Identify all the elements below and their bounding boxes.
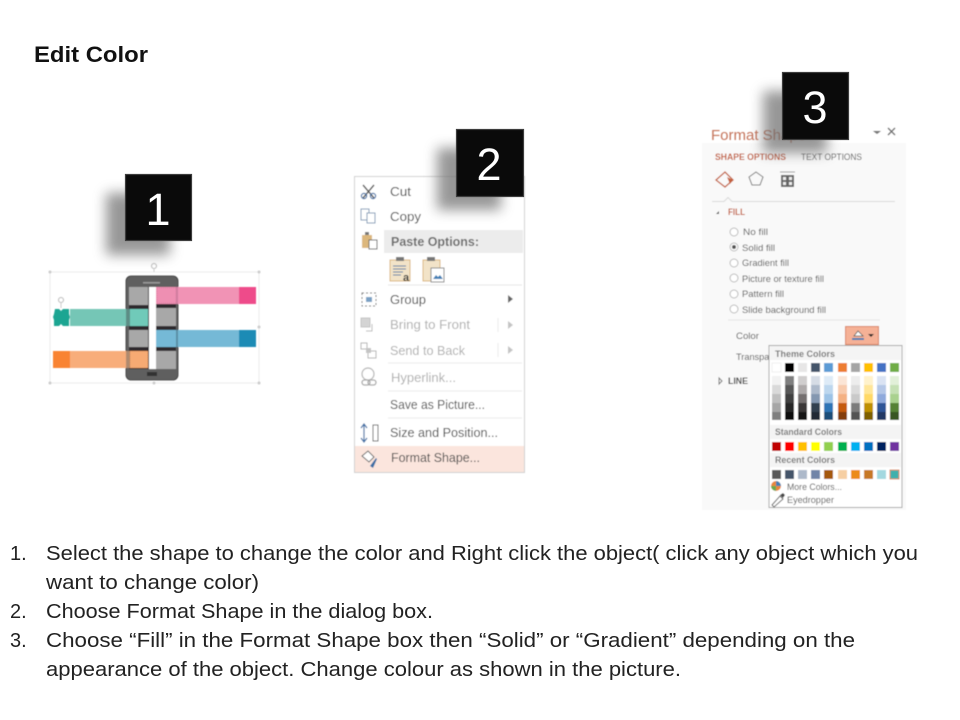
instructions list: Select the shape to change the color and Right click the object( click any object which you xyxy=(46,543,918,565)
menu item: format shape (highlighted) xyxy=(355,446,524,472)
step badge 1: 1 xyxy=(145,184,171,235)
theme colors main row xyxy=(772,363,899,372)
title: Edit Color xyxy=(34,42,148,67)
icon row xyxy=(716,172,795,187)
tabs: SHAPE OPTIONS xyxy=(715,152,786,162)
instructions list: 3. xyxy=(10,630,27,652)
tabs xyxy=(715,152,862,162)
menu item: group: Group xyxy=(390,292,426,307)
teal bar xyxy=(53,309,148,326)
color row and button: Color xyxy=(736,331,759,341)
pink bar xyxy=(156,287,256,304)
panel: step 2 context menu xyxy=(354,176,524,472)
instructions list: 2. xyxy=(10,601,27,623)
menu item: cut xyxy=(361,184,411,199)
menu item: size and position xyxy=(361,424,498,442)
pane controls xyxy=(873,128,895,135)
recent colors xyxy=(770,453,901,479)
instructions list: appearance of the object. Change colour as shown in the picture. xyxy=(46,659,681,681)
fill radio options xyxy=(730,227,826,315)
fill heading: FILL xyxy=(728,207,746,217)
fill radio options: Solid fill xyxy=(742,243,775,253)
menu item: copy xyxy=(361,209,421,224)
step badge 3 xyxy=(763,72,849,153)
standard colors xyxy=(770,425,901,451)
instructions list: 1. xyxy=(10,543,27,565)
menu background xyxy=(354,176,524,472)
fill radio options: Slide background fill xyxy=(742,305,826,315)
orange bar xyxy=(53,351,148,368)
recent colors: Recent Colors xyxy=(775,455,835,465)
fill radio options: Picture or texture fill xyxy=(742,274,824,284)
step badge 3: 3 xyxy=(802,82,828,133)
menu item: group xyxy=(362,292,513,307)
transparency label: Transpa xyxy=(736,352,770,362)
paste icons xyxy=(390,257,444,284)
fill radio options: Pattern fill xyxy=(742,289,784,299)
more colors option: More Colors... xyxy=(787,482,842,492)
standard colors: Standard Colors xyxy=(775,427,842,437)
menu item: send to back: Send to Back xyxy=(390,343,465,358)
line heading xyxy=(719,376,748,386)
theme color shades xyxy=(772,376,899,420)
eyedropper option xyxy=(772,493,834,507)
phone body xyxy=(126,276,178,380)
instructions list: Choose Format Shape in the dialog box. xyxy=(46,601,433,623)
theme colors heading: Theme Colors xyxy=(775,349,835,359)
step badge 1 xyxy=(106,174,192,255)
fill radio options: Gradient fill xyxy=(742,258,789,268)
line heading: LINE xyxy=(728,376,748,386)
menu item: bring to front: Bring to Front xyxy=(390,317,470,332)
menu item: paste options xyxy=(362,230,523,253)
menu item: format shape (highlighted): Format Shape... xyxy=(391,450,480,465)
step badge 2 xyxy=(437,129,524,210)
eyedropper option: Eyedropper xyxy=(787,495,834,505)
tabs: TEXT OPTIONS xyxy=(801,152,862,162)
menu item: hyperlink xyxy=(362,368,456,385)
pane title: Format Shape xyxy=(711,127,806,144)
instructions list xyxy=(10,543,918,681)
menu item: bring to front xyxy=(361,317,513,332)
menu item: paste options: Paste Options: xyxy=(391,235,479,249)
menu item: hyperlink: Hyperlink... xyxy=(391,370,456,385)
step badge 2: 2 xyxy=(476,139,502,190)
menu item: copy: Copy xyxy=(390,209,421,224)
fill heading xyxy=(716,207,746,217)
selection frame xyxy=(48,264,260,384)
color palette popup xyxy=(769,346,902,508)
menu item: save as picture: Save as Picture... xyxy=(390,397,485,412)
panel: step 3 format shape pane xyxy=(702,127,906,510)
panel: step 1 selected phone graphic xyxy=(48,264,260,384)
menu item: cut: Cut xyxy=(390,184,411,199)
paste icons: a xyxy=(403,272,410,284)
instructions list: want to change color) xyxy=(45,572,259,594)
pane background xyxy=(702,143,906,510)
blue bar xyxy=(156,330,256,347)
color row and button xyxy=(736,326,878,344)
menu item: size and position: Size and Position... xyxy=(390,425,498,440)
menu item: send to back xyxy=(361,343,513,358)
theme colors heading xyxy=(770,346,901,360)
fill radio options: No fill xyxy=(743,227,768,237)
instructions list: Choose “Fill” in the Format Shape box then “Solid” or “Gradient” depending on the xyxy=(46,630,855,652)
